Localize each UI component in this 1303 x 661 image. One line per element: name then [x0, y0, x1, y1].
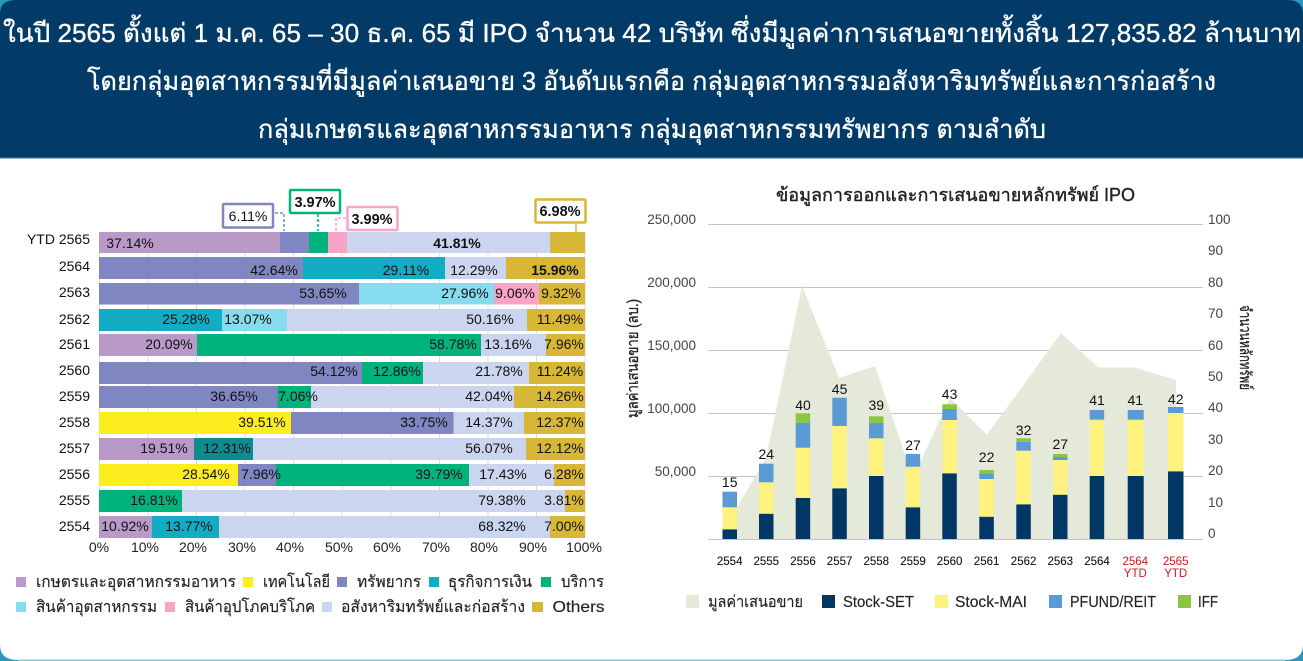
row 2563: 27.96%	[441, 285, 489, 301]
bar 2561: 2561	[974, 556, 999, 568]
bar 2564: 2564	[1084, 556, 1110, 568]
percent axis: 10%	[131, 539, 159, 555]
legend: industries: ทรัพยากร	[357, 574, 421, 591]
percent axis	[89, 539, 602, 555]
row 2564: 29.11%	[383, 262, 429, 278]
row 2564	[59, 257, 585, 279]
bar 2562: 2562	[1011, 556, 1036, 568]
left value axis: 50,000	[655, 464, 696, 479]
legend: industries: บริการ	[561, 574, 604, 591]
bar 2558: 2558	[864, 556, 889, 568]
row 2560: 2560	[59, 362, 90, 378]
right chart title: ข้อมูลการออกและการเสนอขายหลักทรัพย์ IPO	[776, 185, 1135, 206]
legend: industries: เทคโนโลยี	[263, 572, 330, 591]
row 2557: 12.12%	[536, 440, 584, 456]
row 2564: 15.96%	[531, 262, 579, 278]
percent axis: 40%	[276, 539, 304, 555]
percent axis: 30%	[228, 539, 256, 555]
bar 2558	[864, 397, 889, 568]
bar 2565 YTD: 2565	[1163, 556, 1188, 568]
row 2557: 2557	[59, 440, 90, 456]
bar 2564 YTD: YTD	[1124, 568, 1147, 580]
percent axis: 100%	[566, 539, 602, 555]
row 2560: 21.78%	[475, 363, 523, 379]
left value axis: 100,000	[647, 401, 696, 416]
row 2554: 10.92%	[101, 518, 149, 534]
bar 2559: 2559	[900, 556, 926, 568]
left value axis: 200,000	[647, 275, 696, 290]
bar 2559	[900, 437, 926, 568]
row 2559: 42.04%	[465, 388, 513, 404]
bar 2556	[790, 397, 816, 568]
percent axis: 80%	[470, 539, 498, 555]
row 2556	[59, 464, 585, 486]
percent axis: 90%	[519, 539, 547, 555]
row 2556: 6.28%	[544, 466, 584, 482]
row 2563: 9.06%	[495, 285, 535, 301]
row YTD 2565	[27, 231, 585, 253]
bar 2555: 24	[759, 446, 774, 462]
legend: securities: มูลค่าเสนอขาย	[708, 594, 803, 612]
row 2557: 12.31%	[203, 440, 251, 456]
row 2555: 2555	[59, 492, 90, 508]
bar 2554: 15	[722, 474, 738, 490]
row 2554: 7.00%	[544, 518, 584, 534]
stacked bar chart: industry share by year	[27, 231, 602, 555]
row 2554: 13.77%	[165, 518, 213, 534]
row 2555	[59, 490, 585, 512]
row 2564: 2564	[59, 258, 90, 274]
row 2563	[59, 283, 585, 304]
row 2562: 50.16%	[466, 311, 514, 327]
bar 2563: 2563	[1048, 556, 1073, 568]
right count axis: 100	[1208, 212, 1231, 227]
bar 2565 YTD: YTD	[1164, 568, 1187, 580]
row 2563: 9.32%	[541, 285, 581, 301]
bar 2564 YTD: 2564	[1123, 556, 1149, 568]
right count axis: 40	[1208, 400, 1223, 415]
area: offering value	[730, 286, 1176, 539]
right count axis: 30	[1208, 432, 1223, 447]
bar 2557: 45	[832, 381, 848, 397]
bar 2560: 43	[942, 386, 958, 402]
row 2562: 2562	[59, 311, 90, 327]
bar 2565 YTD	[1163, 391, 1188, 580]
bar 2558: 39	[869, 397, 884, 413]
legend: securities: PFUND/REIT	[1070, 594, 1156, 611]
row YTD 2565: 41.81%	[433, 235, 481, 251]
right count axis: 50	[1208, 369, 1223, 384]
row 2557	[59, 438, 585, 460]
bar 2564 YTD	[1123, 392, 1149, 580]
left value axis: 250,000	[647, 212, 696, 227]
bar 2557	[827, 381, 852, 568]
right count axis	[1208, 212, 1231, 541]
legend: industries	[16, 572, 604, 617]
row 2561: 13.16%	[484, 336, 532, 352]
legend: securities: Stock-SET	[843, 594, 914, 611]
row 2560: 12.86%	[373, 363, 421, 379]
row 2558: 12.37%	[536, 414, 584, 430]
right count axis: 60	[1208, 338, 1223, 353]
bar 2564: 41	[1089, 392, 1105, 408]
legend: industries: อสังหาริมทรัพย์และก่อสร้าง	[341, 597, 525, 616]
callout: 6.11% resources: 6.11%	[229, 208, 267, 224]
headline line 3: กลุ่มเกษตรและอุตสาหกรรมอาหาร กลุ่มอุตสาหกรรมทรัพยากร ตามลำดับ	[258, 114, 1046, 145]
bar 2562: 32	[1016, 422, 1032, 438]
callout: 3.97% services: 3.97%	[294, 195, 336, 211]
row 2558: 2558	[59, 414, 90, 430]
row 2556: 17.43%	[479, 466, 527, 482]
left value axis	[647, 212, 696, 479]
row 2562: 25.28%	[162, 311, 210, 327]
left axis title: มูลค่าเสนอขาย (ลบ.)	[625, 299, 643, 418]
row 2556: 28.54%	[182, 466, 230, 482]
row 2556: 7.96%	[241, 466, 281, 482]
legend: industries: ธุรกิจการเงิน	[448, 574, 532, 592]
right axis title: จำนวนหลักทรัพย์	[1236, 305, 1255, 390]
row 2564: 12.29%	[450, 262, 498, 278]
bar 2557: 2557	[827, 556, 852, 568]
bar 2555	[754, 446, 779, 568]
bar 2554	[717, 474, 743, 568]
row 2562: 11.49%	[537, 311, 583, 327]
row 2559: 2559	[59, 388, 90, 404]
bar 2563: 27	[1053, 436, 1068, 452]
bar 2564	[1084, 392, 1110, 568]
row 2562	[59, 309, 585, 331]
bar 2564 YTD: 41	[1128, 392, 1143, 408]
row 2555: 3.81%	[544, 492, 584, 508]
row 2560	[59, 362, 585, 384]
row 2561: 58.78%	[429, 336, 477, 352]
row 2558: 39.51%	[238, 414, 286, 430]
row 2562: 13.07%	[224, 311, 272, 327]
bar 2559: 27	[905, 437, 921, 453]
legend: securities: Stock-MAI	[955, 594, 1027, 611]
percent axis: 60%	[373, 539, 401, 555]
row 2561: 20.09%	[145, 336, 193, 352]
headline line 1: ในปี 2565 ตั้งแต่ 1 ม.ค. 65 – 30 ธ.ค. 65 มี IPO จำนวน 42 บริษัท ซึ่งมีมูลค่าการเสนอขายทั้งสิ้น 127,835.82 ล้านบาท	[3, 14, 1301, 49]
row 2558: 33.75%	[400, 414, 448, 430]
row YTD 2565: 37.14%	[106, 235, 154, 251]
callout: 6.11% resources	[223, 204, 284, 231]
row 2557: 19.51%	[140, 440, 188, 456]
row 2558	[59, 412, 585, 434]
right count axis: 20	[1208, 463, 1223, 478]
row 2559: 36.65%	[210, 388, 258, 404]
header banner	[0, 0, 1303, 158]
percent axis: 20%	[179, 539, 207, 555]
row 2555: 79.38%	[478, 492, 526, 508]
row 2559: 14.26%	[536, 388, 584, 404]
right count axis: 70	[1208, 306, 1223, 321]
row 2557: 56.07%	[465, 440, 513, 456]
right count axis: 0	[1208, 526, 1216, 541]
bar 2554: 2554	[717, 556, 743, 568]
right count axis: 10	[1208, 495, 1223, 510]
bar 2556: 40	[795, 397, 811, 413]
row 2560: 11.24%	[537, 363, 583, 379]
row 2563: 53.65%	[299, 285, 347, 301]
callout: 6.98% others	[536, 200, 586, 232]
row 2561: 2561	[59, 336, 90, 352]
row 2563: 2563	[59, 284, 90, 300]
bar 2561	[974, 449, 999, 568]
row YTD 2565: YTD 2565	[27, 231, 90, 247]
row 2554: 68.32%	[478, 518, 526, 534]
bar 2560	[937, 386, 962, 568]
left value axis: 150,000	[647, 338, 696, 353]
callout: 6.98% others: 6.98%	[539, 204, 581, 220]
percent axis: 50%	[325, 539, 353, 555]
row 2561	[59, 334, 585, 356]
callout: 3.97% services	[290, 190, 340, 231]
legend: industries: เกษตรและอุตสาหกรรมอาหาร	[36, 574, 236, 592]
row 2554: 2554	[59, 518, 90, 534]
row 2564: 42.64%	[250, 262, 298, 278]
right count axis: 80	[1208, 275, 1223, 290]
bar 2561: 22	[979, 449, 995, 465]
legend: industries: Others	[552, 599, 604, 616]
percent axis: 0%	[89, 539, 109, 555]
callout: 3.99% consumer products: 3.99%	[351, 212, 393, 228]
row 2559	[59, 386, 585, 408]
row 2560: 54.12%	[310, 363, 358, 379]
row 2555: 16.81%	[130, 492, 178, 508]
headline line 2: โดยกลุ่มอุตสาหกรรมที่มีมูลค่าเสนอขาย 3 อันดับแรกคือ กลุ่มอุตสาหกรรมอสังหาริมทรัพย์และการก่อสร้าง	[87, 63, 1216, 97]
bar 2556: 2556	[790, 556, 816, 568]
combo chart: IPO value and count	[625, 212, 1255, 580]
bar 2563	[1048, 436, 1073, 568]
right count axis: 90	[1208, 243, 1223, 258]
legend: securities	[686, 594, 1218, 612]
legend: securities: IFF	[1198, 594, 1218, 611]
legend: industries: สินค้าอุปโภคบริโภค	[185, 597, 315, 617]
row 2556: 39.79%	[415, 466, 463, 482]
row 2554	[59, 516, 585, 538]
row 2561: 7.96%	[544, 336, 584, 352]
bar 2565 YTD: 42	[1168, 391, 1184, 407]
legend: industries: สินค้าอุตสาหกรรม	[36, 598, 157, 617]
bar 2555: 2555	[754, 556, 779, 568]
bar 2562	[1011, 422, 1036, 568]
bar 2560: 2560	[937, 556, 962, 568]
callout: 3.99% consumer products	[336, 207, 398, 232]
percent axis: 70%	[422, 539, 450, 555]
row 2556: 2556	[59, 466, 90, 482]
row 2559: 7.06%	[278, 388, 318, 404]
row 2558: 14.37%	[465, 414, 513, 430]
